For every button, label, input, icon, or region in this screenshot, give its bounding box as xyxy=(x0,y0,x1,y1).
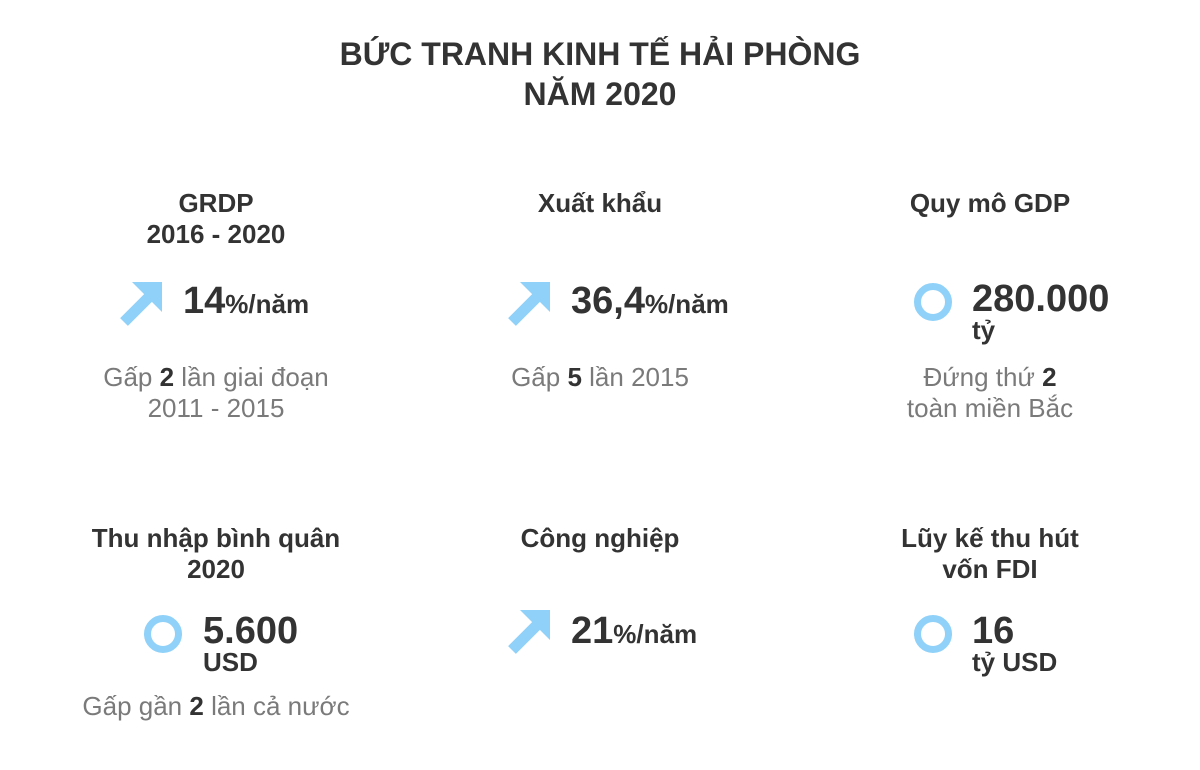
value: tỷ xyxy=(972,315,995,345)
value: USD xyxy=(203,647,258,677)
title: BỨC TRANH KINH TẾ HẢI PHÒNG xyxy=(340,36,860,72)
panel: Thu nhap xyxy=(82,523,350,721)
icon: ring xyxy=(914,615,952,653)
panel: Quy mo GDP xyxy=(907,188,1109,423)
icon: arrow xyxy=(120,282,162,326)
note: Đứng thứ 2 xyxy=(923,362,1057,392)
note xyxy=(907,362,1073,423)
heading: Công nghiệp xyxy=(521,523,679,553)
icon: arrow xyxy=(508,282,550,326)
note xyxy=(103,362,329,423)
heading xyxy=(901,523,1079,584)
value: 21%/năm xyxy=(571,610,697,652)
value xyxy=(972,278,1109,345)
heading: vốn FDI xyxy=(942,554,1038,584)
heading: Xuất khẩu xyxy=(538,188,662,218)
note: Gấp 2 lần giai đoạn xyxy=(103,362,329,392)
note: Gấp 5 lần 2015 xyxy=(511,362,689,392)
note: Gấp gần 2 lần cả nước xyxy=(82,691,350,721)
heading: GRDP xyxy=(178,188,254,218)
heading xyxy=(147,188,285,249)
value xyxy=(972,610,1057,677)
panel: FDI xyxy=(901,523,1079,677)
panel: Xuat khau xyxy=(508,188,729,392)
title xyxy=(340,36,860,112)
icon: ring xyxy=(144,615,182,653)
icon: arrow xyxy=(508,610,550,654)
value: 36,4%/năm xyxy=(571,280,729,322)
value: tỷ USD xyxy=(972,647,1057,677)
heading: Lũy kế thu hút xyxy=(901,523,1079,553)
note: 2011 - 2015 xyxy=(148,393,284,423)
value: 14%/năm xyxy=(183,280,309,322)
value xyxy=(203,610,298,677)
value: 5.600 xyxy=(203,610,298,652)
value: 16 xyxy=(972,610,1014,652)
heading: 2020 xyxy=(187,554,245,584)
value: 280.000 xyxy=(972,278,1109,320)
heading: Thu nhập bình quân xyxy=(92,523,340,553)
heading: Quy mô GDP xyxy=(910,188,1070,218)
icon: ring xyxy=(914,283,952,321)
heading xyxy=(92,523,340,584)
panel: GRDP xyxy=(103,188,329,423)
note: toàn miền Bắc xyxy=(907,393,1073,423)
panel: Cong nghiep xyxy=(508,523,697,654)
title: NĂM 2020 xyxy=(524,76,676,112)
heading: 2016 - 2020 xyxy=(147,219,285,249)
